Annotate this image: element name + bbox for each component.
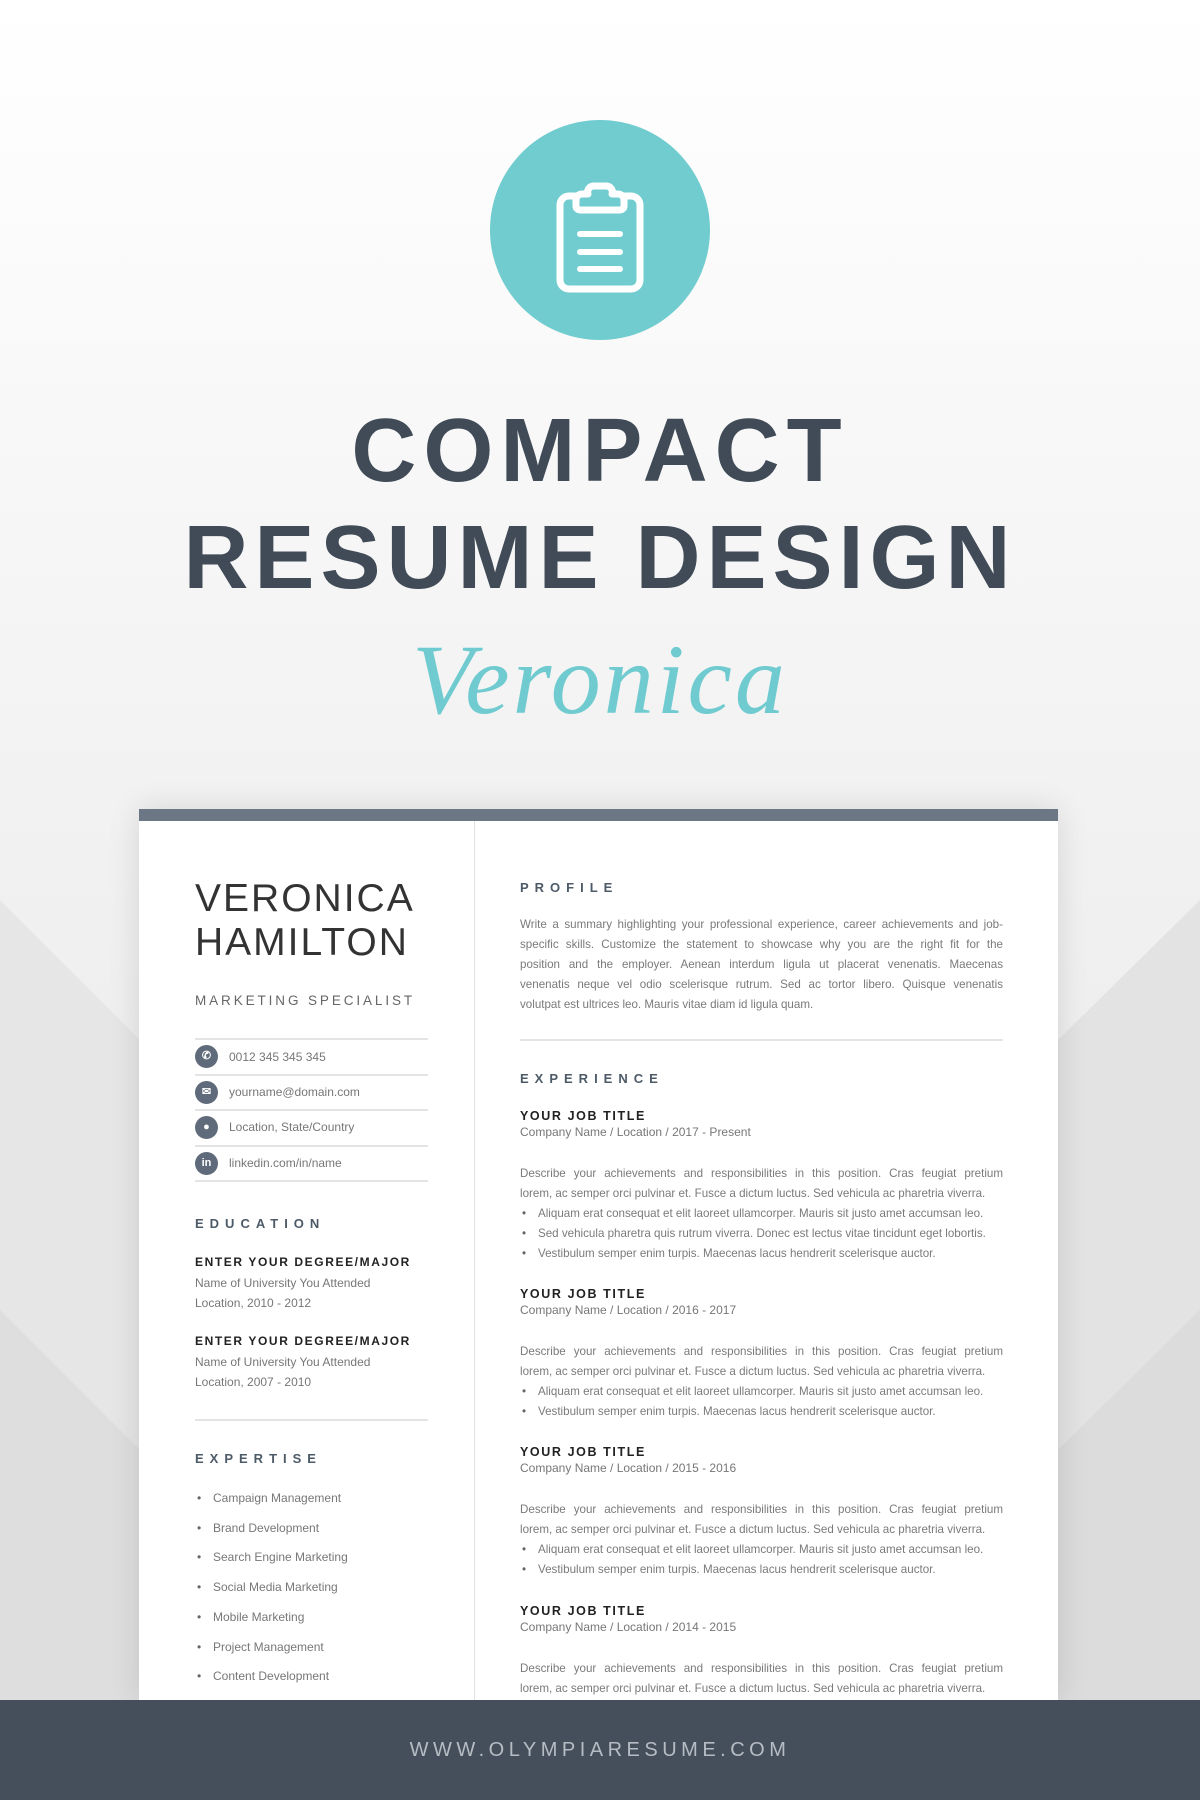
education (195, 1216, 411, 1389)
education: ENTER YOUR DEGREE/MAJOR (195, 1334, 411, 1348)
right column: specific skills. Customize the statement to showcase why you are the right fit for the (520, 938, 1003, 951)
job 2: Vestibulum semper enim turpis. Maecenas lacus hendrerit scelerisque auctor. (538, 1405, 936, 1418)
contact list: in (202, 1157, 211, 1169)
education: EDUCATION (195, 1216, 325, 1231)
script subtitle: Veronica (412, 624, 788, 735)
job 2: Describe your achievements and responsibilities in this position. Cras feugiat pretium (520, 1345, 1003, 1358)
right column: volutpat est ultrices leo. Mauris vitae diam id ligula quam. (520, 998, 813, 1011)
job 1: YOUR JOB TITLE (520, 1109, 646, 1123)
name: HAMILTON (195, 921, 409, 964)
expertise: Project Management (213, 1640, 324, 1654)
job 1: Vestibulum semper enim turpis. Maecenas lacus hendrerit scelerisque auctor. (538, 1247, 936, 1260)
right column: venenatis neque vel odio scelerisque rutrum. Sed ac tortor libero. Quisque venenatis (520, 978, 1003, 991)
expertise: EXPERTISE (195, 1451, 322, 1466)
job 1: lorem, ac semper orci pulvinar et. Fusce a dictum luctus. Sed vehicula ac pharetria viverra. (520, 1187, 985, 1200)
job 1: Sed vehicula pharetra quis rutrum viverra. Donec est lectus vitae tincidunt eget lobortis. (538, 1227, 986, 1240)
job 1 (520, 1109, 1003, 1260)
expertise: Search Engine Marketing (213, 1550, 348, 1564)
education: Name of University You Attended (195, 1355, 370, 1369)
expertise: Content Development (213, 1669, 329, 1683)
experience: EXPERIENCE (520, 1071, 664, 1086)
name (195, 877, 415, 964)
profile: PROFILE (520, 880, 618, 895)
expertise: Social Media Marketing (213, 1580, 338, 1594)
job 3: Company Name / Location / 2015 - 2016 (520, 1461, 736, 1475)
contact list: ✆ (202, 1050, 211, 1062)
job 4: Company Name / Location / 2014 - 2015 (520, 1620, 736, 1634)
expertise: Mobile Marketing (213, 1610, 304, 1624)
title line 2: RESUME DESIGN (183, 508, 1017, 608)
job 1: Company Name / Location / 2017 - Present (520, 1125, 751, 1139)
contact list: Location, State/Country (229, 1120, 354, 1134)
title line 1: COMPACT (351, 401, 849, 501)
job 2: YOUR JOB TITLE (520, 1287, 646, 1301)
job 3: Vestibulum semper enim turpis. Maecenas lacus hendrerit scelerisque auctor. (538, 1563, 936, 1576)
contact list: yourname@domain.com (229, 1085, 360, 1099)
contact list: ● (203, 1121, 210, 1133)
job 1: Describe your achievements and responsibilities in this position. Cras feugiat pretium (520, 1167, 1003, 1180)
job 3: Aliquam erat consequat et elit laoreet ullamcorper. Mauris sit justo amet accumsan leo. (538, 1543, 983, 1556)
job 3: YOUR JOB TITLE (520, 1445, 646, 1459)
icon: clipboard circle (490, 120, 710, 340)
education: Name of University You Attended (195, 1276, 370, 1290)
job 4: YOUR JOB TITLE (520, 1604, 646, 1618)
job 1: Aliquam erat consequat et elit laoreet ullamcorper. Mauris sit justo amet accumsan leo. (538, 1207, 983, 1220)
expertise: Brand Development (213, 1521, 319, 1535)
job 4: lorem, ac semper orci pulvinar et. Fusce a dictum luctus. Sed vehicula ac pharetria viverra. (520, 1682, 985, 1695)
job 3 (520, 1445, 1003, 1576)
job 3: lorem, ac semper orci pulvinar et. Fusce a dictum luctus. Sed vehicula ac pharetria viverra. (520, 1523, 985, 1536)
name: VERONICA (195, 877, 415, 920)
expertise: Campaign Management (213, 1491, 341, 1505)
education: ENTER YOUR DEGREE/MAJOR (195, 1255, 411, 1269)
job 3: Describe your achievements and responsibilities in this position. Cras feugiat pretium (520, 1503, 1003, 1516)
job role: MARKETING SPECIALIST (195, 993, 415, 1008)
right column: position and the employer. Aenean interdum ligula ut placerat venenatis. Maecenas (520, 958, 1003, 971)
job 2 (520, 1287, 1003, 1418)
right column (520, 880, 1003, 1695)
education: Location, 2007 - 2010 (195, 1375, 311, 1389)
contact list (195, 1038, 428, 1182)
contact list: 0012 345 345 345 (229, 1050, 326, 1064)
right column: Write a summary highlighting your professional experience, career achievements and job- (520, 918, 1003, 931)
job 4 (520, 1604, 1003, 1695)
expertise (195, 1451, 348, 1683)
job 4: Describe your achievements and responsibilities in this position. Cras feugiat pretium (520, 1662, 1003, 1675)
job 2: lorem, ac semper orci pulvinar et. Fusce a dictum luctus. Sed vehicula ac pharetria viverra. (520, 1365, 985, 1378)
footer band (0, 1700, 1200, 1800)
job 2: Aliquam erat consequat et elit laoreet ullamcorper. Mauris sit justo amet accumsan leo. (538, 1385, 983, 1398)
contact list: linkedin.com/in/name (229, 1156, 342, 1170)
contact list: ✉ (202, 1086, 211, 1098)
footer band: WWW.OLYMPIARESUME.COM (410, 1739, 790, 1761)
job 2: Company Name / Location / 2016 - 2017 (520, 1303, 736, 1317)
education: Location, 2010 - 2012 (195, 1296, 311, 1310)
resume paper (139, 809, 1058, 1700)
